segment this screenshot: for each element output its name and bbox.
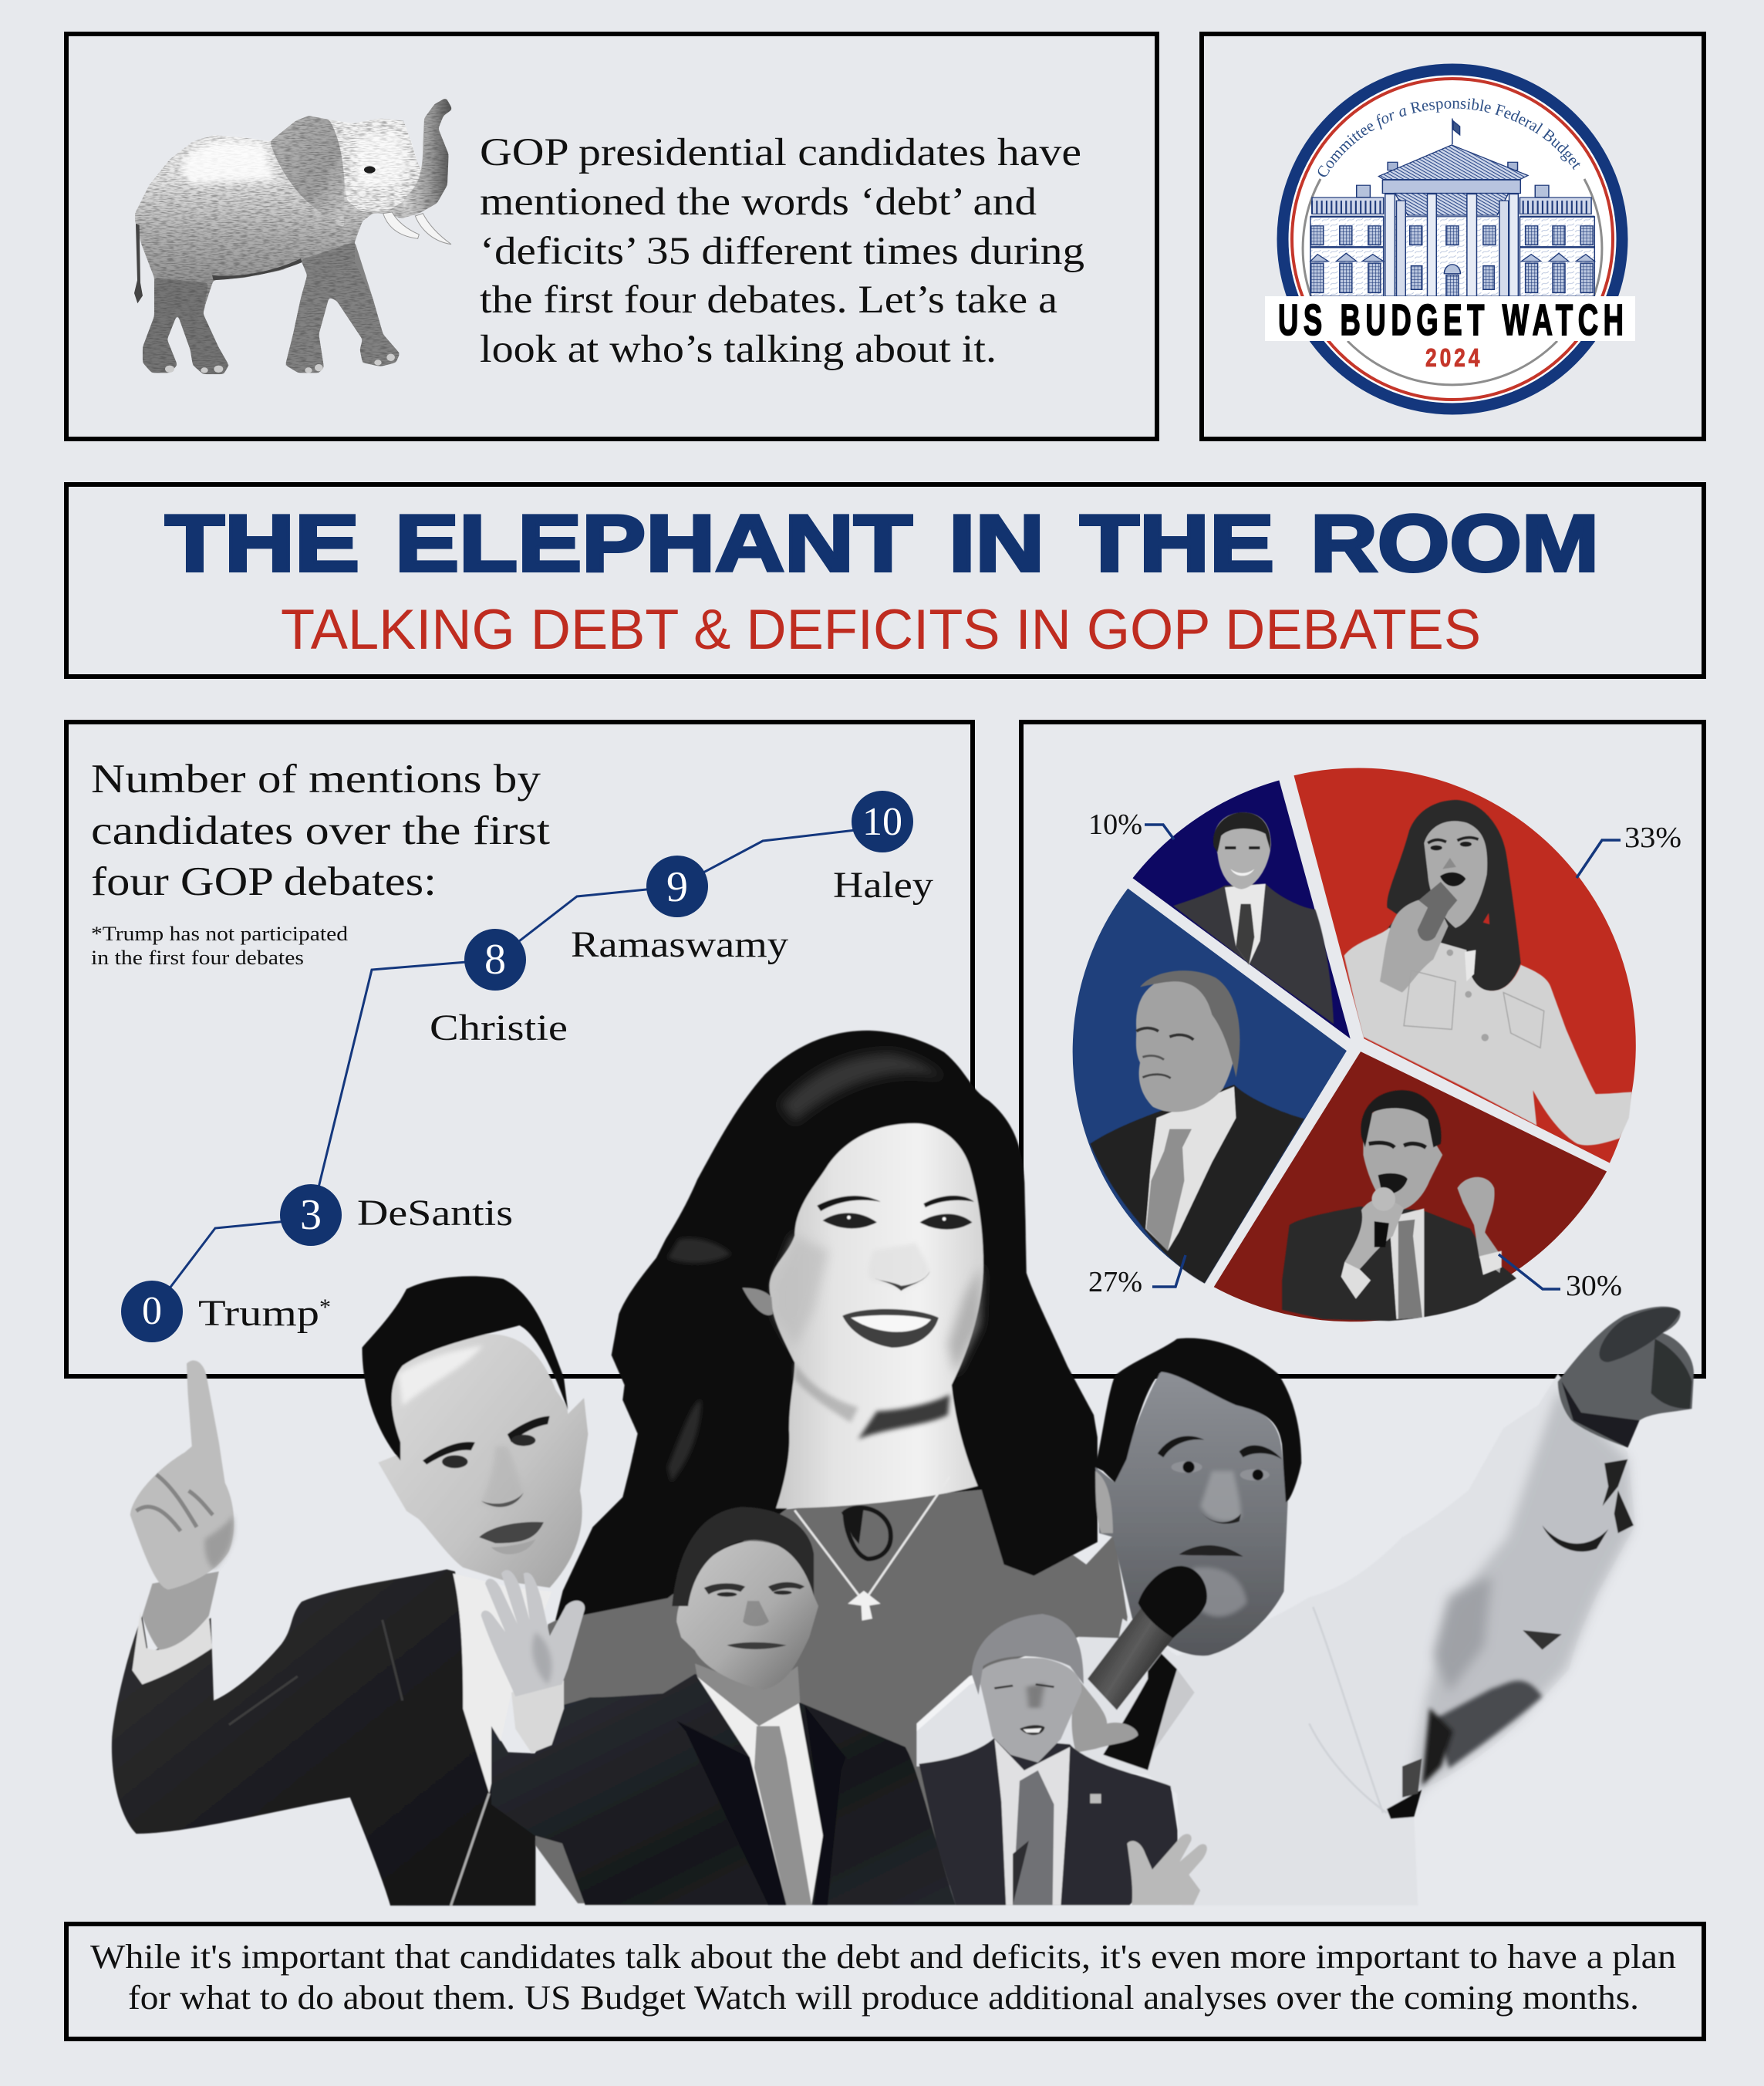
- figure: Christie: [916, 1307, 1694, 1905]
- intro text: look at who’s talking about it.: [480, 328, 997, 371]
- closing text: for what to do about them. US Budget Watch will produce additional analyses over the coming months.: [128, 1979, 1639, 2017]
- footnote: in the first four debates: [91, 947, 304, 969]
- data point: Trump 0: [121, 1281, 331, 1342]
- data point: Haley 10: [833, 791, 933, 906]
- panel: intro with elephant: [66, 34, 1157, 439]
- intro text: mentioned the words ‘debt’ and: [480, 181, 1037, 224]
- logo: name: US BUDGET WATCH: [1278, 296, 1624, 345]
- logo: white name band: [1265, 296, 1635, 341]
- heading: main title: [165, 499, 1599, 589]
- data point: Christie 8: Christie: [430, 1008, 568, 1048]
- pie label: 10%: 10%: [1088, 808, 1142, 841]
- heading: main title: THE: [165, 499, 359, 589]
- logo: White House sketch: [1310, 119, 1594, 296]
- pie slice: Ramaswamy 30%: [1214, 1051, 1607, 1321]
- data point: Ramaswamy 9: [571, 856, 788, 965]
- figure: DeSantis: [481, 1507, 956, 1905]
- figure: Ramaswamy: [112, 1276, 588, 1905]
- closing text: While it's important that candidates talk about the debt and deficits, it's even more important to have a plan: [90, 1938, 1676, 1976]
- data point: Ramaswamy 9: Ramaswamy: [571, 924, 788, 965]
- intro text: GOP presidential candidates have: [480, 131, 1081, 174]
- panel: closing statement: [66, 1924, 1704, 2039]
- data point: DeSantis 3: 3: [300, 1191, 322, 1239]
- intro text: ‘deficits’ 35 different times during: [480, 230, 1084, 273]
- data point: DeSantis 3: [280, 1184, 513, 1246]
- data point: Trump 0: Trump: [198, 1293, 319, 1334]
- panel: US Budget Watch logo: [1199, 32, 1706, 441]
- logo rings: [1283, 69, 1622, 409]
- pie label: 33%: 33%: [1624, 822, 1681, 854]
- photo collage: candidates: [112, 1031, 1694, 1905]
- data point: Trump 0: *: [319, 1294, 331, 1320]
- footnote: *Trump has not participated: [91, 923, 348, 945]
- logo: curved committee name: Committee for a Responsible Federal Budget: [1317, 98, 1580, 177]
- chart heading: candidates over the first: [91, 808, 550, 853]
- data point: Christie 8: [430, 929, 568, 1048]
- pie slice: Haley 33%: [1294, 768, 1636, 1163]
- pie slice: DeSantis 10%: [1132, 781, 1351, 1038]
- connector line: [152, 827, 882, 1311]
- closing text: [90, 1938, 1676, 2017]
- heading: subtitle: TALKING DEBT & DEFICITS IN GOP DEBATES: [281, 599, 1481, 661]
- chart heading: [91, 757, 550, 904]
- figure: Trump: [919, 1614, 1207, 1905]
- heading: main title: ELEPHANT: [395, 499, 912, 589]
- heading: main title: ROOM: [1310, 499, 1599, 589]
- pie label: 30%: 30%: [1566, 1270, 1622, 1302]
- data point: DeSantis 3: DeSantis: [357, 1193, 513, 1234]
- data point: Trump 0: 0: [142, 1289, 162, 1333]
- panel: title: [66, 484, 1704, 677]
- footnote: [91, 923, 348, 969]
- data point: Haley 10: Haley: [833, 865, 933, 906]
- data point: Haley 10: 10: [862, 800, 902, 844]
- pie label: 27%: 27%: [1088, 1266, 1142, 1298]
- figure: Haley: [535, 1031, 1128, 1903]
- data point: Ramaswamy 9: 9: [666, 863, 688, 911]
- data point: Christie 8: 8: [484, 936, 506, 984]
- panel: pie chart: [1021, 722, 1704, 1376]
- logo: year: 2024: [1425, 344, 1480, 373]
- icon: engraved elephant: [134, 98, 453, 374]
- intro text: [480, 131, 1084, 371]
- pie leader lines: [1145, 825, 1621, 1289]
- pie slice: Christie 27%: [1073, 889, 1347, 1283]
- chart heading: four GOP debates:: [91, 859, 437, 904]
- heading: main title: IN: [949, 499, 1044, 589]
- panel: mentions line chart: [66, 722, 973, 1376]
- intro text: the first four debates. Let’s take a: [480, 278, 1057, 322]
- chart heading: Number of mentions by: [91, 757, 541, 802]
- heading: main title: THE: [1080, 499, 1274, 589]
